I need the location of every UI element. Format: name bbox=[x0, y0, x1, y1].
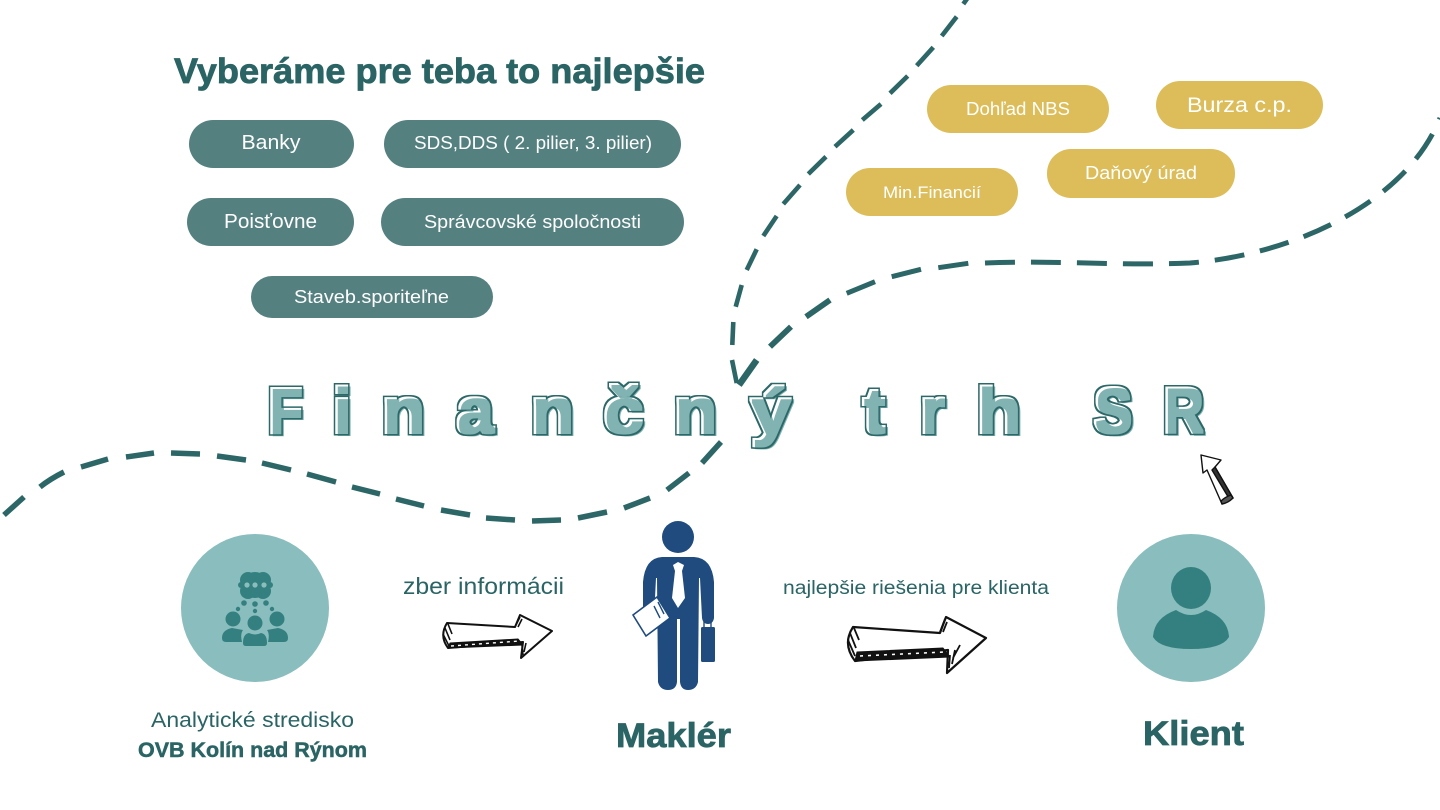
dashed curve: upper bbox=[732, 0, 968, 383]
text: OVB Kolín nad Rýnom: OVB Kolín nad Rýnom bbox=[138, 739, 367, 762]
icon: analytics circle bbox=[181, 534, 329, 682]
text: Analytické stredisko: Analytické stredisko bbox=[151, 709, 354, 732]
heading: Finančný trh SR: n bbox=[530, 375, 574, 447]
text: najlepšie riešenia pre klienta: najlepšie riešenia pre klienta bbox=[783, 578, 1049, 599]
icon: thought cloud bbox=[238, 572, 273, 599]
panel: regulators bbox=[846, 81, 1323, 216]
heading: Finančný trh SR: n bbox=[673, 375, 717, 447]
text: Maklér: Maklér bbox=[616, 717, 731, 755]
pill: Daňový úrad bbox=[1047, 149, 1235, 198]
pill: Burza c.p. bbox=[1156, 81, 1323, 129]
pill: Dohľad NBS bbox=[927, 85, 1109, 133]
icon: arrow to client bbox=[848, 617, 986, 673]
pill: SDS,DDS bbox=[384, 120, 681, 168]
icon: broker figure bbox=[633, 521, 715, 690]
pill: Banky bbox=[189, 120, 354, 168]
pill: Dohľad NBS: Dohľad NBS bbox=[966, 99, 1070, 119]
dashed curve: lower left bbox=[4, 442, 721, 521]
heading: Finančný trh SR: i bbox=[332, 375, 352, 447]
pill: Správcovské spoločnosti bbox=[381, 198, 684, 246]
icon: small sketched arrow bbox=[1201, 455, 1233, 504]
panel: institutions bbox=[187, 120, 684, 318]
heading: Finančný trh SR: h bbox=[976, 375, 1021, 446]
pill: Správcovské spoločnosti: Správcovské spoločnosti bbox=[424, 211, 641, 232]
title: Vyberáme pre teba to najlepšie bbox=[174, 52, 705, 91]
heading: Finančný trh SR: r bbox=[920, 374, 945, 446]
pill: Staveb.sporiteľne: Staveb.sporiteľne bbox=[294, 287, 449, 307]
pill: SDS,DDS: SDS,DDS ( 2. pilier, 3. pilier) bbox=[414, 132, 652, 153]
heading: Finančný trh SR bbox=[268, 374, 1203, 447]
pill: Min.Financií: Min.Financií bbox=[883, 184, 981, 202]
pill: Poisťovne bbox=[187, 198, 354, 246]
icon: connecting dots bbox=[236, 600, 274, 613]
pill: Daňový úrad: Daňový úrad bbox=[1085, 163, 1197, 183]
heading: Finančný trh SR: č bbox=[603, 375, 643, 446]
heading: Finančný trh SR: t bbox=[862, 375, 885, 446]
pill: Burza c.p.: Burza c.p. bbox=[1187, 94, 1292, 117]
heading: Finančný trh SR: S bbox=[1094, 375, 1132, 446]
icon: three people bbox=[222, 612, 288, 646]
pill: Poisťovne: Poisťovne bbox=[224, 211, 317, 233]
dashed curve: right bbox=[739, 118, 1440, 385]
heading: Finančný trh SR: n bbox=[381, 375, 425, 447]
heading: Finančný trh SR: ý bbox=[750, 375, 791, 446]
heading: Finančný trh SR: F bbox=[268, 374, 302, 446]
text: Klient: Klient bbox=[1143, 715, 1244, 753]
text: zber informácii: zber informácii bbox=[403, 573, 564, 599]
pill: Staveb.sporiteľne bbox=[251, 276, 493, 318]
heading: Finančný trh SR: a bbox=[456, 375, 494, 446]
icon: client circle bbox=[1117, 534, 1265, 682]
heading: Finančný trh SR: R bbox=[1163, 375, 1203, 446]
pill: Min.Financií bbox=[846, 168, 1018, 216]
icon: arrow to broker bbox=[443, 615, 552, 658]
pill: Banky: Banky bbox=[242, 132, 300, 154]
